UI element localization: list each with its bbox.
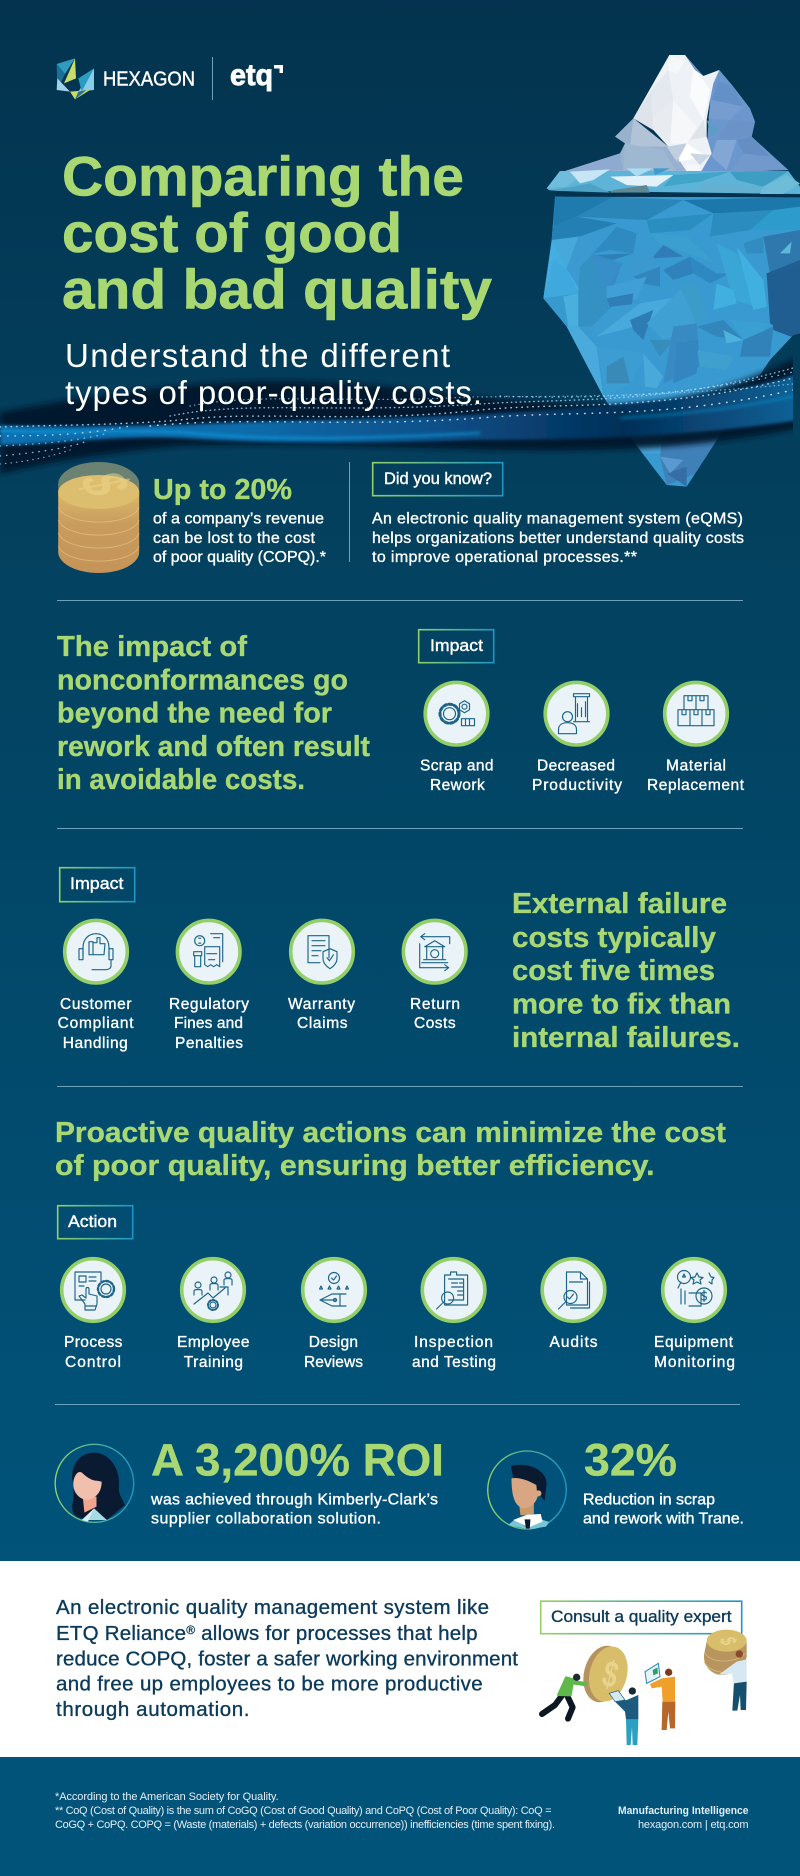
tag: action xyxy=(58,1206,133,1239)
label: employee training: Employee xyxy=(177,1334,250,1351)
stat figure: Up to 20% xyxy=(153,474,292,506)
stat figure: A 3,200% ROI xyxy=(151,1435,444,1486)
tag: did you know xyxy=(373,463,503,496)
stat description: of poor quality (COPQ).* xyxy=(153,549,326,566)
label: decreased productivity: Productivity xyxy=(532,777,622,794)
subtitle xyxy=(65,337,482,411)
illustration: people moving coins xyxy=(542,1630,747,1745)
stat description: supplier collaboration solution. xyxy=(151,1511,381,1528)
avatar: man xyxy=(488,1451,566,1529)
label: inspection and testing: Inspection xyxy=(414,1334,493,1351)
footnotes: ** CoQ (Cost of Quality) is the sum of CoGQ (Cost of Good Quality) and CoPQ (Cost of Poor Quality): CoQ = xyxy=(55,1805,552,1817)
label: scrap and rework: Scrap and xyxy=(420,758,494,775)
label: customer compliant handling: Handling xyxy=(63,1035,128,1052)
big coin: $ xyxy=(598,1652,623,1696)
heading: external failure costs: External failure xyxy=(512,888,727,920)
label: employee training: Training xyxy=(184,1354,243,1371)
heading: impact of nonconformances: The impact of xyxy=(57,631,248,663)
iceberg waterline shadow xyxy=(548,190,800,197)
label: process control xyxy=(64,1334,123,1371)
label: design reviews: Reviews xyxy=(304,1354,363,1371)
paragraph: eQMS benefits: An electronic quality management system like xyxy=(56,1596,489,1619)
footer band xyxy=(0,1757,800,1876)
Hexagon wordmark: HEXAGON xyxy=(103,68,195,91)
icon: material replacement xyxy=(665,682,727,745)
did you know text: to improve operational processes.** xyxy=(372,549,637,566)
label: regulatory fines and penalties: Regulatory xyxy=(169,996,249,1013)
iceberg peak xyxy=(563,55,788,173)
title: Comparing the xyxy=(62,144,464,208)
stat description: of a company’s revenue xyxy=(153,510,324,528)
paragraph: eQMS benefits: through automation. xyxy=(56,1698,250,1721)
coin stack xyxy=(704,1630,747,1675)
paragraph: eQMS benefits xyxy=(56,1596,518,1721)
icon: return costs xyxy=(403,920,466,983)
heading: impact of nonconformances xyxy=(57,631,370,796)
did you know text: An electronic quality management system (eQMS) xyxy=(372,510,743,528)
tag: impact xyxy=(419,630,494,663)
coin stack: $ xyxy=(714,1635,743,1647)
paragraph: eQMS benefits: ETQ Reliance xyxy=(56,1622,186,1645)
icon: coin stack xyxy=(58,462,145,573)
paragraph: eQMS benefits: reduce COPQ, foster a safer working environment xyxy=(56,1648,518,1671)
stat: 32 percent xyxy=(583,1435,744,1528)
label: warranty claims: Claims xyxy=(297,1015,348,1032)
button: consult a quality expert xyxy=(541,1601,742,1634)
stat description xyxy=(150,1492,438,1528)
digital wave xyxy=(0,356,800,474)
footnotes: *According to the American Society for Quality. xyxy=(55,1791,279,1803)
title: cost of good xyxy=(62,201,402,264)
heading: proactive quality actions xyxy=(55,1117,727,1182)
icon: warranty claims xyxy=(291,920,353,983)
label: material replacement xyxy=(647,758,745,794)
icon: inspection and testing xyxy=(422,1259,485,1321)
paragraph: eQMS benefits: allows for processes that help xyxy=(195,1622,478,1645)
heading: impact of nonconformances: in avoidable costs. xyxy=(57,764,305,796)
big coin xyxy=(578,1642,633,1706)
label: employee training xyxy=(177,1334,250,1371)
heading: external failure costs: cost five times xyxy=(512,955,715,987)
etq wordmark: etq xyxy=(230,59,273,92)
heading: proactive quality actions: of poor quality, ensuring better efficiency. xyxy=(55,1150,655,1182)
icon: regulatory fines and penalties xyxy=(177,920,240,983)
icon: process control xyxy=(62,1259,124,1321)
label: equipment monitoring: Monitoring xyxy=(654,1354,735,1371)
heading: external failure costs: more to fix than xyxy=(512,988,731,1020)
stat: up to 20 percent xyxy=(153,474,326,566)
person pushing coin xyxy=(542,1674,585,1719)
label: customer compliant handling: Customer xyxy=(60,996,132,1013)
label: regulatory fines and penalties xyxy=(169,996,249,1052)
person with laptop xyxy=(645,1663,675,1730)
label: regulatory fines and penalties: Fines and xyxy=(174,1015,243,1032)
paragraph: eQMS benefits: and free up employees to be more productive xyxy=(56,1673,483,1696)
label: warranty claims: Warranty xyxy=(288,996,355,1013)
iceberg illustration xyxy=(530,55,800,493)
stat description: and rework with Trane. xyxy=(583,1511,744,1528)
label: customer compliant handling: Compliant xyxy=(58,1015,134,1032)
heading: impact of nonconformances: beyond the need for xyxy=(57,698,332,730)
title: and bad quality xyxy=(62,258,492,320)
stat description: was achieved through Kimberly-Clark’s xyxy=(150,1492,438,1509)
label: process control: Process xyxy=(64,1334,123,1351)
tag: did you know: Did you know? xyxy=(384,469,492,488)
label: equipment monitoring: Equipment xyxy=(654,1334,734,1351)
label: equipment monitoring xyxy=(654,1334,735,1371)
icon: scrap and rework xyxy=(425,682,488,745)
icon: coin stack: $ xyxy=(63,468,145,501)
iceberg underwater body xyxy=(530,193,800,493)
stat description xyxy=(583,1492,744,1528)
did you know text: helps organizations better understand quality costs xyxy=(372,530,744,547)
person holding coin stack xyxy=(718,1650,747,1711)
button: consult a quality expert: Consult a quality expert xyxy=(551,1607,732,1626)
stat figure: 32% xyxy=(584,1435,677,1486)
label: material replacement: Replacement xyxy=(647,777,745,794)
label: regulatory fines and penalties: Penalties xyxy=(175,1035,243,1052)
etq corner bracket xyxy=(274,65,283,73)
panel: white call to action xyxy=(0,1561,800,1757)
label: process control: Control xyxy=(65,1354,121,1371)
label: design reviews: Design xyxy=(309,1334,358,1351)
did you know text xyxy=(372,510,744,566)
label: return costs: Costs xyxy=(414,1015,456,1032)
avatar: woman xyxy=(55,1444,134,1522)
footer contact: hexagon.com | etq.com xyxy=(638,1819,748,1831)
heading: impact of nonconformances: rework and often result xyxy=(57,731,370,763)
label: customer compliant handling xyxy=(58,996,134,1052)
logo divider xyxy=(212,57,214,100)
heading: proactive quality actions: Proactive quality actions can minimize the cost xyxy=(55,1117,727,1149)
icon: design reviews xyxy=(303,1259,365,1321)
tag: impact: Impact xyxy=(70,874,124,893)
iceberg shelf xyxy=(547,168,800,194)
person with tablet xyxy=(609,1687,638,1745)
label: warranty claims xyxy=(288,996,355,1032)
icon: decreased productivity xyxy=(545,682,608,745)
stat: 3,200 percent ROI xyxy=(150,1435,444,1528)
label: material replacement: Material xyxy=(666,758,726,775)
label: decreased productivity: Decreased xyxy=(537,758,615,775)
heading: external failure costs: internal failures. xyxy=(512,1022,740,1054)
label: design reviews xyxy=(304,1334,363,1371)
title xyxy=(62,144,492,320)
label: scrap and rework: Rework xyxy=(430,777,485,794)
label: inspection and testing xyxy=(412,1334,496,1371)
label: audits: Audits xyxy=(550,1334,598,1351)
tag: action: Action xyxy=(68,1212,117,1231)
heading: external failure costs: costs typically xyxy=(512,922,716,954)
label: decreased productivity xyxy=(532,758,622,794)
icon: customer complaint handling xyxy=(65,920,127,983)
heading: external failure costs xyxy=(512,888,740,1054)
tag: impact: Impact xyxy=(430,636,483,655)
icon: audits xyxy=(542,1259,605,1321)
icon: employee training xyxy=(182,1259,244,1321)
stat description: can be lost to the cost xyxy=(153,530,316,547)
paragraph: eQMS benefits: ® xyxy=(186,1623,195,1637)
tag: impact xyxy=(60,868,135,902)
icon: equipment monitoring xyxy=(663,1259,725,1321)
subtitle: Understand the different xyxy=(65,337,450,374)
footnotes xyxy=(55,1791,555,1831)
label: return costs: Return xyxy=(410,996,460,1013)
heading: impact of nonconformances: nonconformances go xyxy=(57,664,348,696)
footer contact: Manufacturing Intelligence xyxy=(618,1805,748,1817)
footer contact xyxy=(618,1805,748,1831)
hexagon mark xyxy=(57,58,94,99)
label: return costs xyxy=(410,996,460,1032)
footnotes: CoGQ + CoPQ. COPQ = (Waste (materials) + defects (variation occurrence)) inefficiencies (time spent fixing). xyxy=(55,1819,555,1831)
stat description xyxy=(153,510,326,566)
logo: Hexagon and ETQ xyxy=(57,57,283,100)
subtitle: types of poor-quality costs. xyxy=(65,374,482,411)
stat description: Reduction in scrap xyxy=(583,1492,715,1509)
label: inspection and testing: and Testing xyxy=(412,1354,496,1371)
label: scrap and rework xyxy=(420,758,494,794)
